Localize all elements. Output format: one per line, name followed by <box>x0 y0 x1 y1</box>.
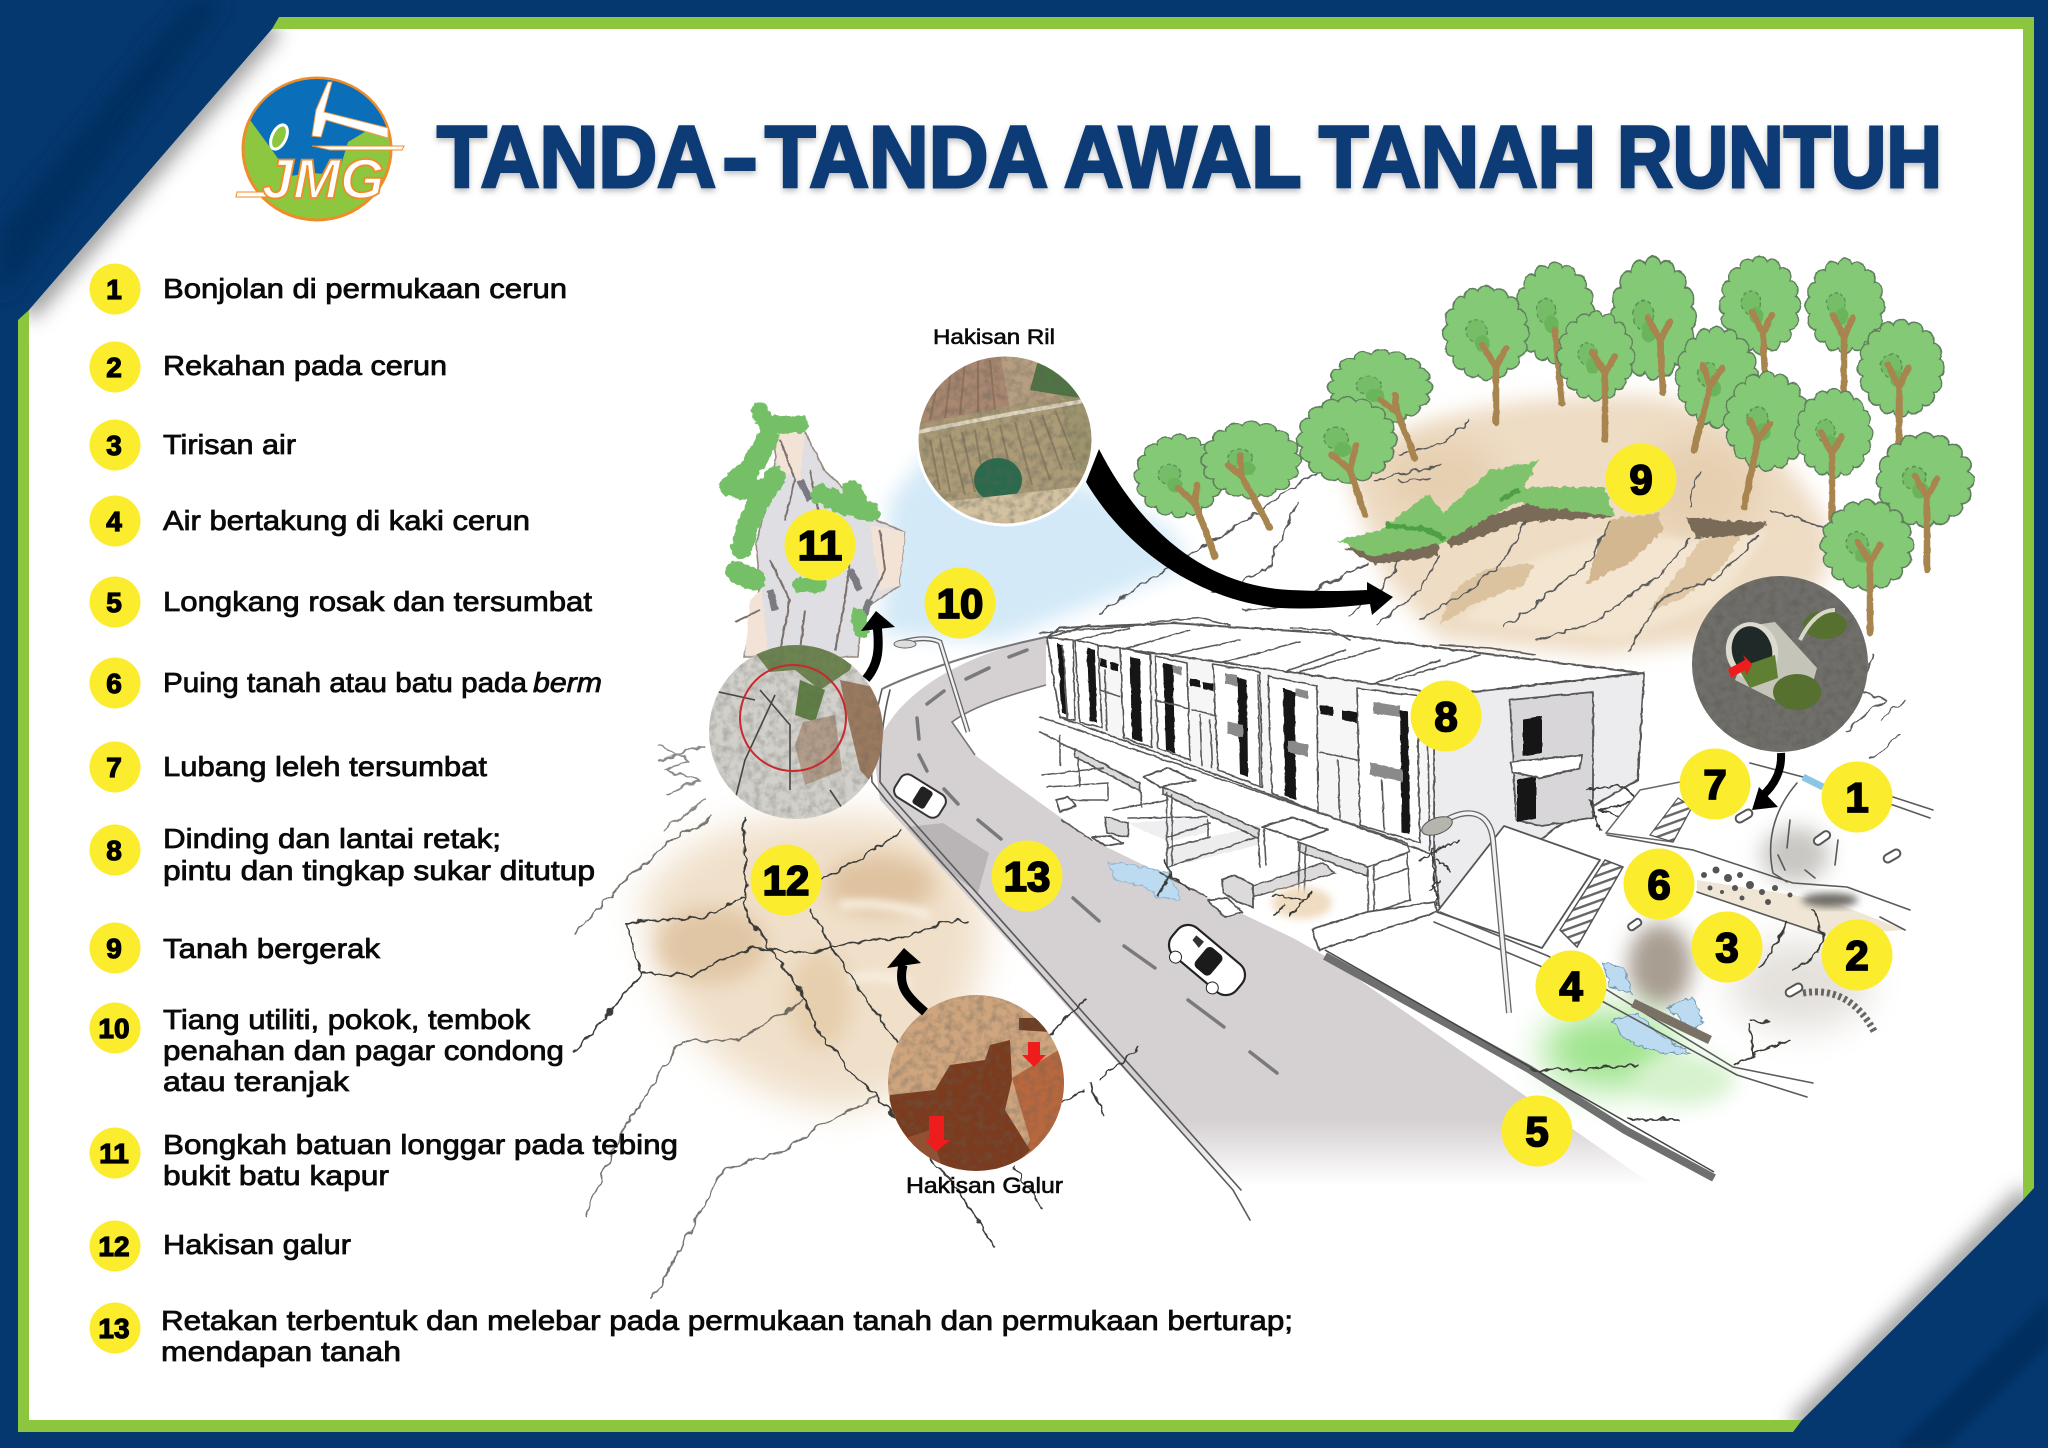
puddle on road <box>1108 862 1180 900</box>
marker 1: 1 <box>1845 774 1869 821</box>
marker 13 <box>992 840 1062 912</box>
retaining slope, drains and stairs <box>1325 763 1933 1178</box>
marker 12: 12 <box>763 857 809 904</box>
item 5 <box>90 576 592 628</box>
item 1: Bonjolan di permukaan cerun <box>163 273 567 304</box>
item 13: mendapan tanah <box>161 1336 401 1367</box>
legend list <box>90 264 1293 1367</box>
title: TANDA <box>437 109 716 206</box>
car ports and front steps <box>1040 717 1437 950</box>
item 1: 1 <box>106 274 122 305</box>
item 3 <box>90 420 296 470</box>
item 13: Retakan terbentuk dan melebar pada permukaan tanah dan permukaan berturap; <box>161 1305 1293 1336</box>
item 8 <box>90 823 595 886</box>
marker 6 <box>1624 848 1694 920</box>
item 6: berm <box>533 667 602 698</box>
item 6: Puing tanah atau batu pada <box>163 667 527 698</box>
marker 7: 7 <box>1703 761 1727 808</box>
marker 12 <box>750 844 822 916</box>
item 3: Tirisan air <box>163 429 296 460</box>
item 11 <box>90 1128 678 1191</box>
item 10 <box>90 1002 564 1097</box>
item 6 <box>90 658 602 708</box>
left ground with tan erosion and cracks <box>575 745 1042 1300</box>
item 13 <box>90 1302 1293 1367</box>
item 7: Lubang leleh tersumbat <box>163 751 487 782</box>
item 8: Dinding dan lantai retak; <box>163 823 501 854</box>
marker 1 <box>1822 762 1892 832</box>
marker 4 <box>1536 950 1606 1022</box>
title: TANAH <box>1319 109 1596 206</box>
marker 2: 2 <box>1845 932 1869 979</box>
marker 11: 11 <box>798 522 842 569</box>
arrow from Hakisan Galur to ground <box>887 948 925 1012</box>
marker 8 <box>1410 680 1482 752</box>
marker 11 <box>784 510 856 580</box>
item 11: 11 <box>99 1138 129 1169</box>
inset photo: Hakisan Galur <box>885 993 1067 1175</box>
item 8: 8 <box>106 835 122 866</box>
arrow from rock photo to limestone <box>861 611 895 679</box>
label: Hakisan Galur: Hakisan Galur <box>906 1173 1063 1198</box>
marker 4: 4 <box>1559 963 1583 1010</box>
marker 3: 3 <box>1715 924 1739 971</box>
logo: JMG <box>236 78 404 220</box>
item 13: 13 <box>98 1313 130 1344</box>
end unit balcony <box>1510 692 1593 826</box>
title <box>437 109 1942 206</box>
item 12: 12 <box>98 1231 130 1262</box>
item 4 <box>90 496 530 546</box>
slope bulge <box>1771 783 1838 882</box>
car on road <box>1159 919 1251 1005</box>
item 1 <box>90 264 567 314</box>
item 11: bukit batu kapur <box>163 1160 389 1191</box>
illustration: landslide scene <box>575 255 1975 1300</box>
item 5: Longkang rosak dan tersumbat <box>163 586 592 617</box>
marker 8: 8 <box>1434 693 1458 740</box>
trees <box>1133 255 1975 633</box>
item 10: atau teranjak <box>163 1066 350 1097</box>
item 12: Hakisan galur <box>163 1229 351 1260</box>
item 10: Tiang utiliti, pokok, tembok <box>163 1004 531 1035</box>
road lane dashes <box>917 650 1277 1073</box>
item 9: 9 <box>106 933 122 964</box>
marker 6: 6 <box>1647 861 1671 908</box>
item 7 <box>90 742 487 792</box>
small lamp post <box>894 639 968 732</box>
marker 9: 9 <box>1629 456 1653 503</box>
item 4: 4 <box>106 506 122 537</box>
item 4: Air bertakung di kaki cerun <box>163 505 530 536</box>
item 2: Rekahan pada cerun <box>163 350 447 381</box>
marker 13: 13 <box>1004 853 1050 900</box>
label: Hakisan Ril: Hakisan Ril <box>933 326 1055 349</box>
arrow from pipe photo to number 7 area <box>1752 753 1781 810</box>
title: AWAL <box>1064 109 1300 206</box>
item 8: pintu dan tingkap sukar ditutup <box>163 855 595 886</box>
marker 2 <box>1822 920 1892 990</box>
small pebbles <box>1627 808 1902 998</box>
big lamp post <box>1437 813 1509 1013</box>
item 5: 5 <box>106 587 122 618</box>
road cracks <box>1000 1000 1140 1120</box>
item 7: 7 <box>106 752 122 783</box>
marker 5 <box>1502 1096 1572 1166</box>
debris <box>1701 866 1792 905</box>
item 9 <box>90 922 381 974</box>
marker 10 <box>924 568 996 638</box>
title: - <box>722 109 758 206</box>
number markers on the scene <box>750 444 1892 1166</box>
item 2 <box>90 342 447 392</box>
inset photo: blocked weep hole <box>1690 574 1870 754</box>
terraced houses <box>1040 618 1644 912</box>
item 6: 6 <box>106 668 122 699</box>
inset photo: limestone rock <box>705 640 887 824</box>
inset photo: Hakisan Ril <box>915 353 1095 530</box>
item 3: 3 <box>106 430 122 461</box>
item 10: penahan dan pagar condong <box>163 1035 564 1066</box>
marker 7 <box>1680 748 1750 820</box>
marker 9 <box>1606 444 1676 514</box>
title: TANDA <box>765 109 1046 206</box>
item 9: Tanah bergerak <box>163 933 381 964</box>
arrow from Hakisan Ril to slope <box>1086 449 1393 615</box>
title: RUNTUH <box>1617 109 1942 206</box>
driveway stain and cracks <box>1158 785 1640 919</box>
item 2: 2 <box>106 352 122 383</box>
limestone hill <box>730 410 905 657</box>
marker 5: 5 <box>1525 1108 1549 1155</box>
sky <box>880 450 1190 640</box>
car near top <box>891 771 949 821</box>
road <box>871 637 1660 1220</box>
logo: JMG: JMG <box>262 147 384 210</box>
item 10: 10 <box>98 1013 130 1044</box>
marker 3 <box>1692 912 1762 982</box>
hill with tan slope and landslide <box>1100 395 1905 760</box>
item 11: Bongkah batuan longgar pada tebing <box>163 1129 678 1160</box>
item 12 <box>90 1220 351 1272</box>
marker 10: 10 <box>937 580 983 627</box>
